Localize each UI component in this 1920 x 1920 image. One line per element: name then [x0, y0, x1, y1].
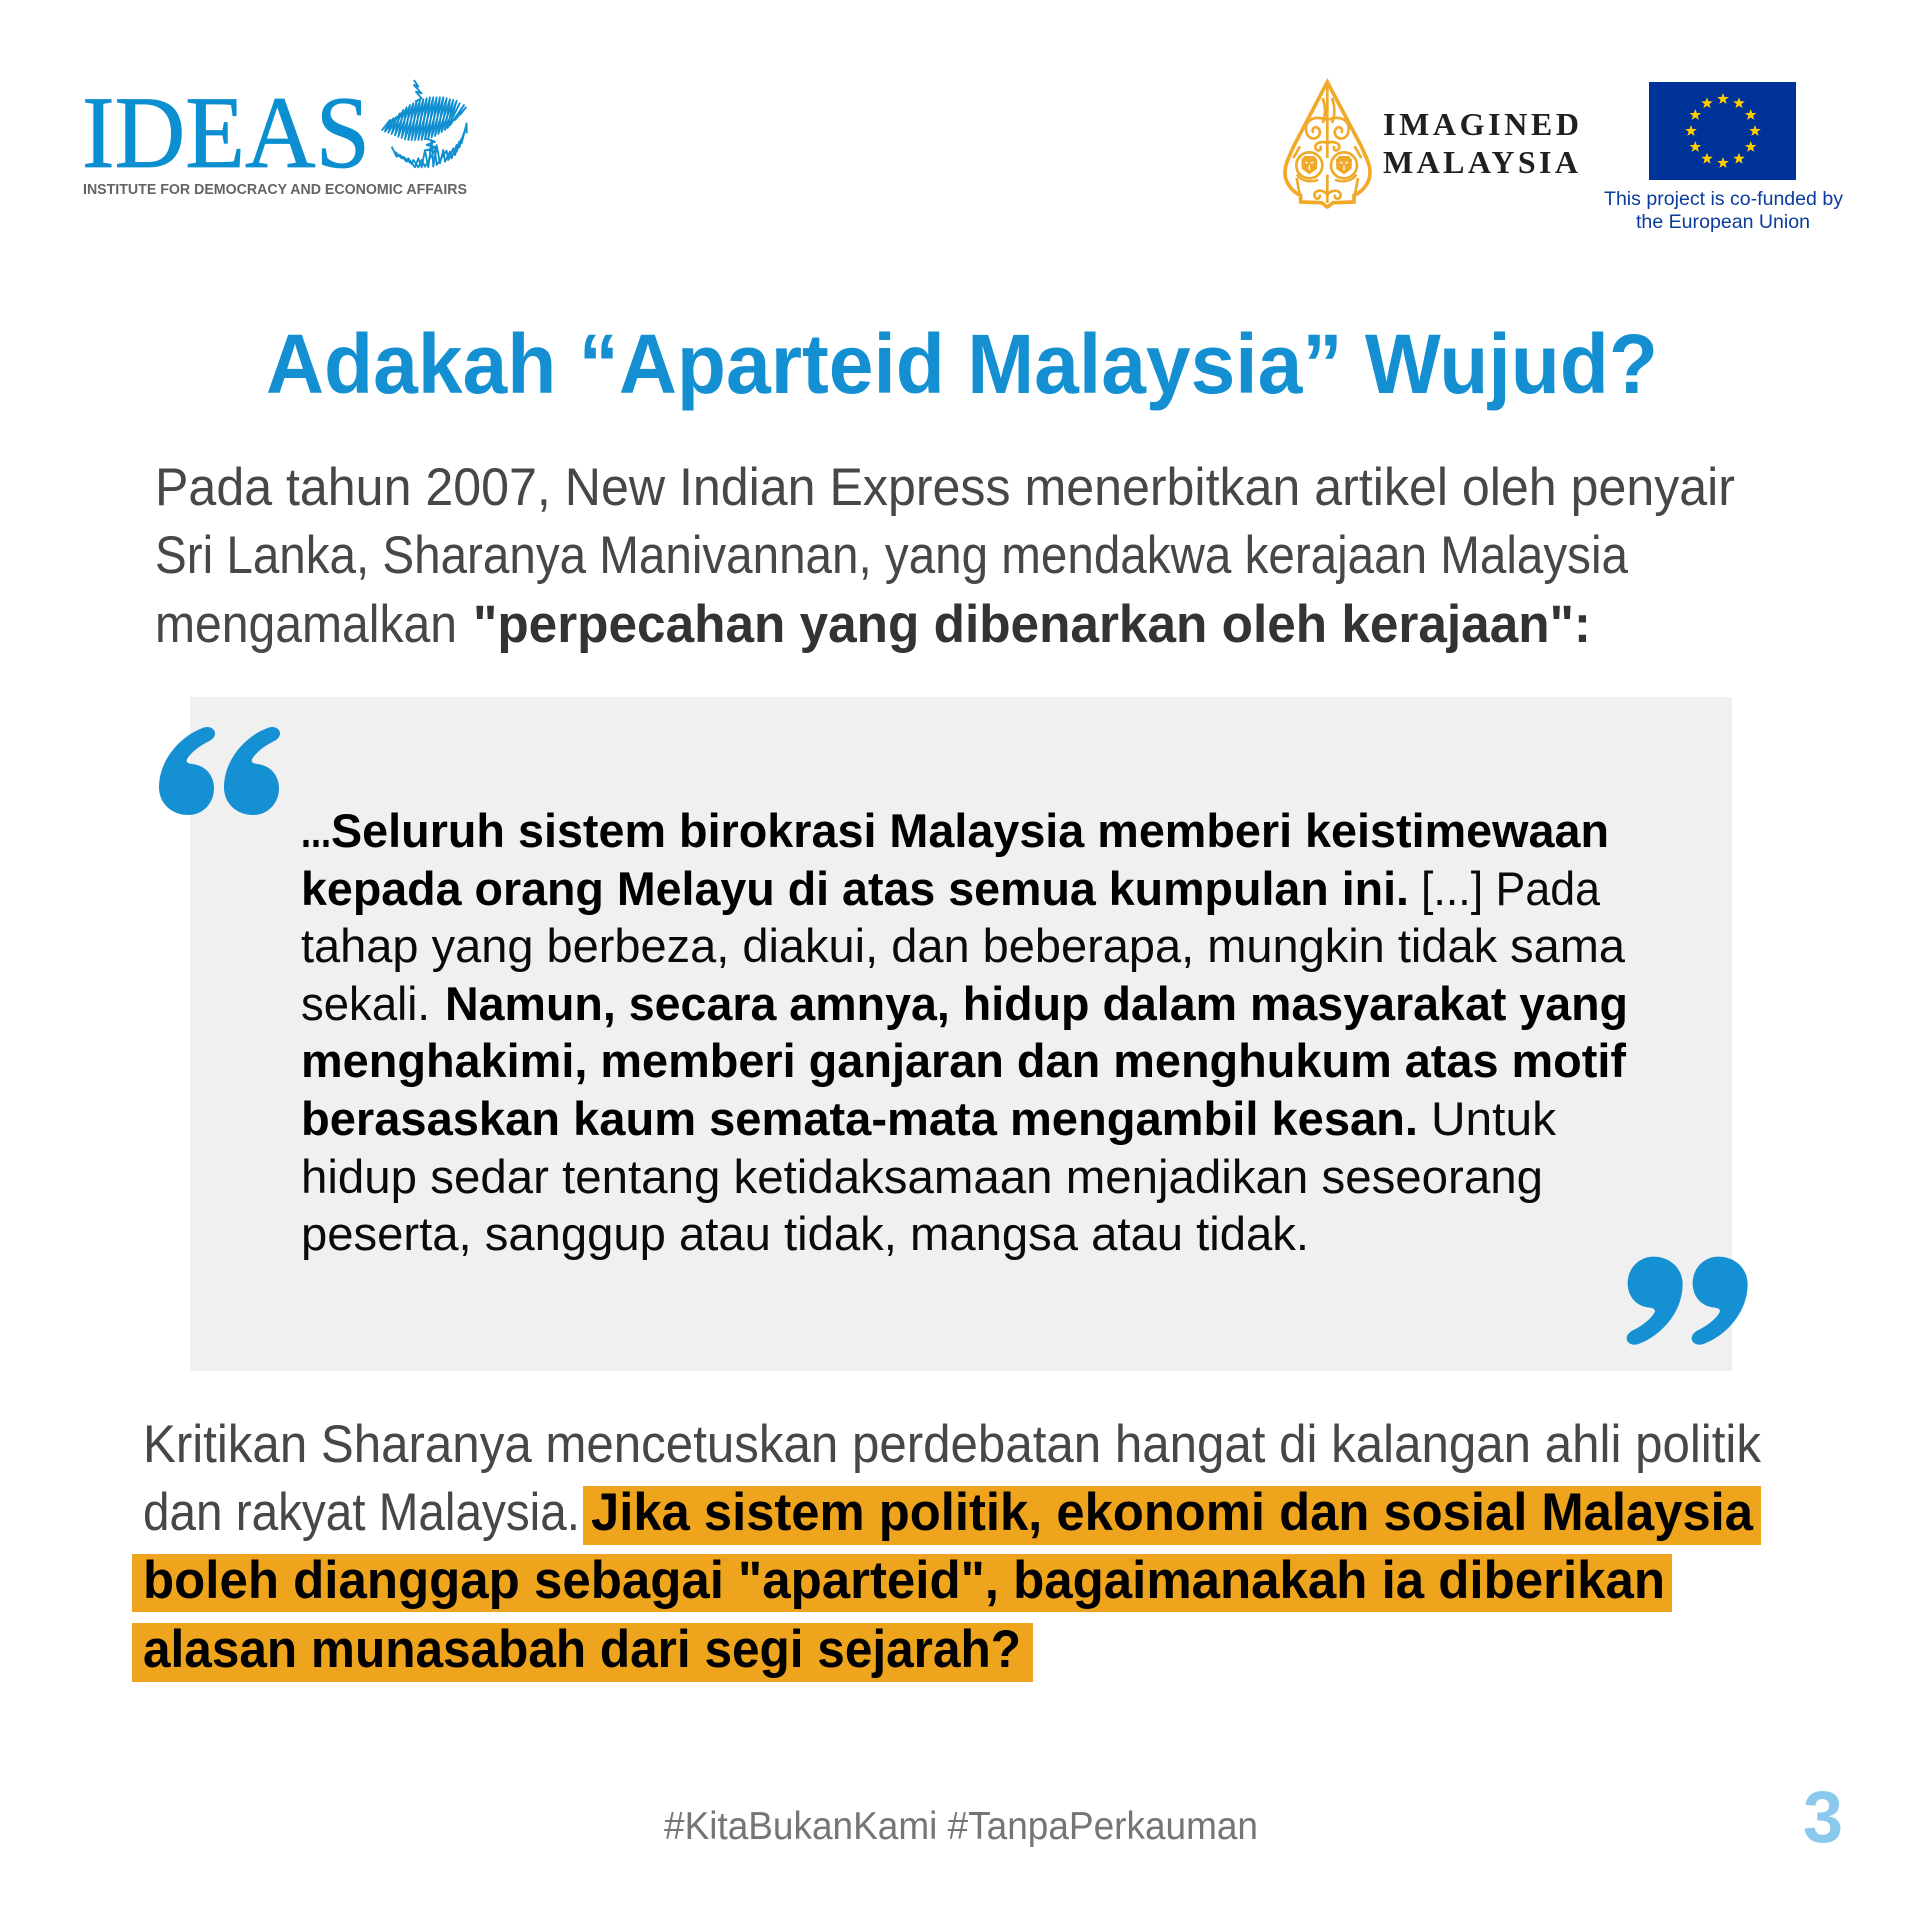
icon: scribbled dove: [382, 80, 467, 167]
EU co-funding note: [1604, 188, 1843, 233]
quote text: menghakimi, memberi ganjaran dan menghukum atas motif: [301, 1034, 1626, 1087]
Imagined Malaysia wordmark: [1383, 106, 1579, 180]
Imagined Malaysia wordmark: IMAGINED: [1383, 106, 1579, 142]
intro paragraph: mengamalkan: [155, 595, 457, 654]
closing text: boleh dianggap sebagai "aparteid", bagaimanakah ia diberikan: [143, 1551, 1665, 1610]
highlight bars: [132, 1486, 1761, 1682]
icon: EU flag: [1649, 82, 1796, 180]
quote text: hidup sedar tentang ketidaksamaan menjadikan seseorang: [301, 1150, 1543, 1203]
icon: closing quotation mark: [1627, 1257, 1748, 1345]
hashtags: #KitaBukanKami #TanpaPerkauman: [664, 1805, 1258, 1848]
closing text: Jika sistem politik, ekonomi dan sosial Malaysia: [591, 1483, 1753, 1542]
page number: 3: [1803, 1777, 1843, 1858]
IDEAS wordmark: IDEAS: [82, 76, 370, 190]
quote background: [190, 697, 1732, 1371]
closing text: [143, 1415, 1761, 1679]
closing text: alasan munasabah dari segi sejarah?: [143, 1620, 1021, 1679]
quote text: sekali.: [301, 977, 430, 1030]
closing text: Kritikan Sharanya mencetuskan perdebatan hangat di kalangan ahli politik: [143, 1415, 1761, 1474]
quote text: berasaskan kaum semata-mata mengambil kesan.: [301, 1092, 1418, 1145]
quote text: tahap yang berbeza, diakui, dan beberapa, mungkin tidak sama: [301, 919, 1626, 972]
quote text: Seluruh sistem birokrasi Malaysia memberi keistimewaan: [331, 804, 1609, 857]
quote text: kepada orang Melayu di atas semua kumpulan ini.: [301, 862, 1409, 915]
closing text: dan rakyat Malaysia.: [143, 1483, 580, 1542]
quote text: Namun, secara amnya, hidup dalam masyarakat yang: [445, 977, 1628, 1030]
title: Adakah “Aparteid Malaysia” Wujud?: [266, 317, 1658, 411]
EU co-funding note: This project is co-funded by: [1604, 188, 1843, 210]
intro paragraph: Pada tahun 2007, New Indian Express menerbitkan artikel oleh penyair: [155, 458, 1735, 517]
logo: Imagined Malaysia: [1285, 82, 1579, 207]
logo: European Union: [1604, 82, 1843, 233]
icon: wayang emblem: [1285, 82, 1370, 207]
quote text: [301, 804, 1628, 1260]
icon: opening quotation mark: [159, 727, 280, 815]
quote text: [...] Pada: [1421, 862, 1601, 915]
Imagined Malaysia wordmark: MALAYSIA: [1383, 144, 1578, 180]
panel: quote: [159, 697, 1748, 1371]
logo: IDEAS: [82, 76, 467, 198]
intro paragraph: Sri Lanka, Sharanya Manivannan, yang mendakwa kerajaan Malaysia: [155, 526, 1628, 585]
quote text: peserta, sanggup atau tidak, mangsa atau tidak.: [301, 1207, 1309, 1260]
EU co-funding note: the European Union: [1636, 211, 1810, 233]
quote text: Untuk: [1431, 1092, 1557, 1145]
quote text: ...: [301, 804, 331, 857]
intro paragraph: "perpecahan yang dibenarkan oleh kerajaan":: [473, 595, 1591, 654]
intro paragraph: [155, 458, 1735, 654]
closing paragraph with highlight: [132, 1415, 1761, 1682]
IDEAS full name: INSTITUTE FOR DEMOCRACY AND ECONOMIC AFFAIRS: [83, 182, 467, 198]
